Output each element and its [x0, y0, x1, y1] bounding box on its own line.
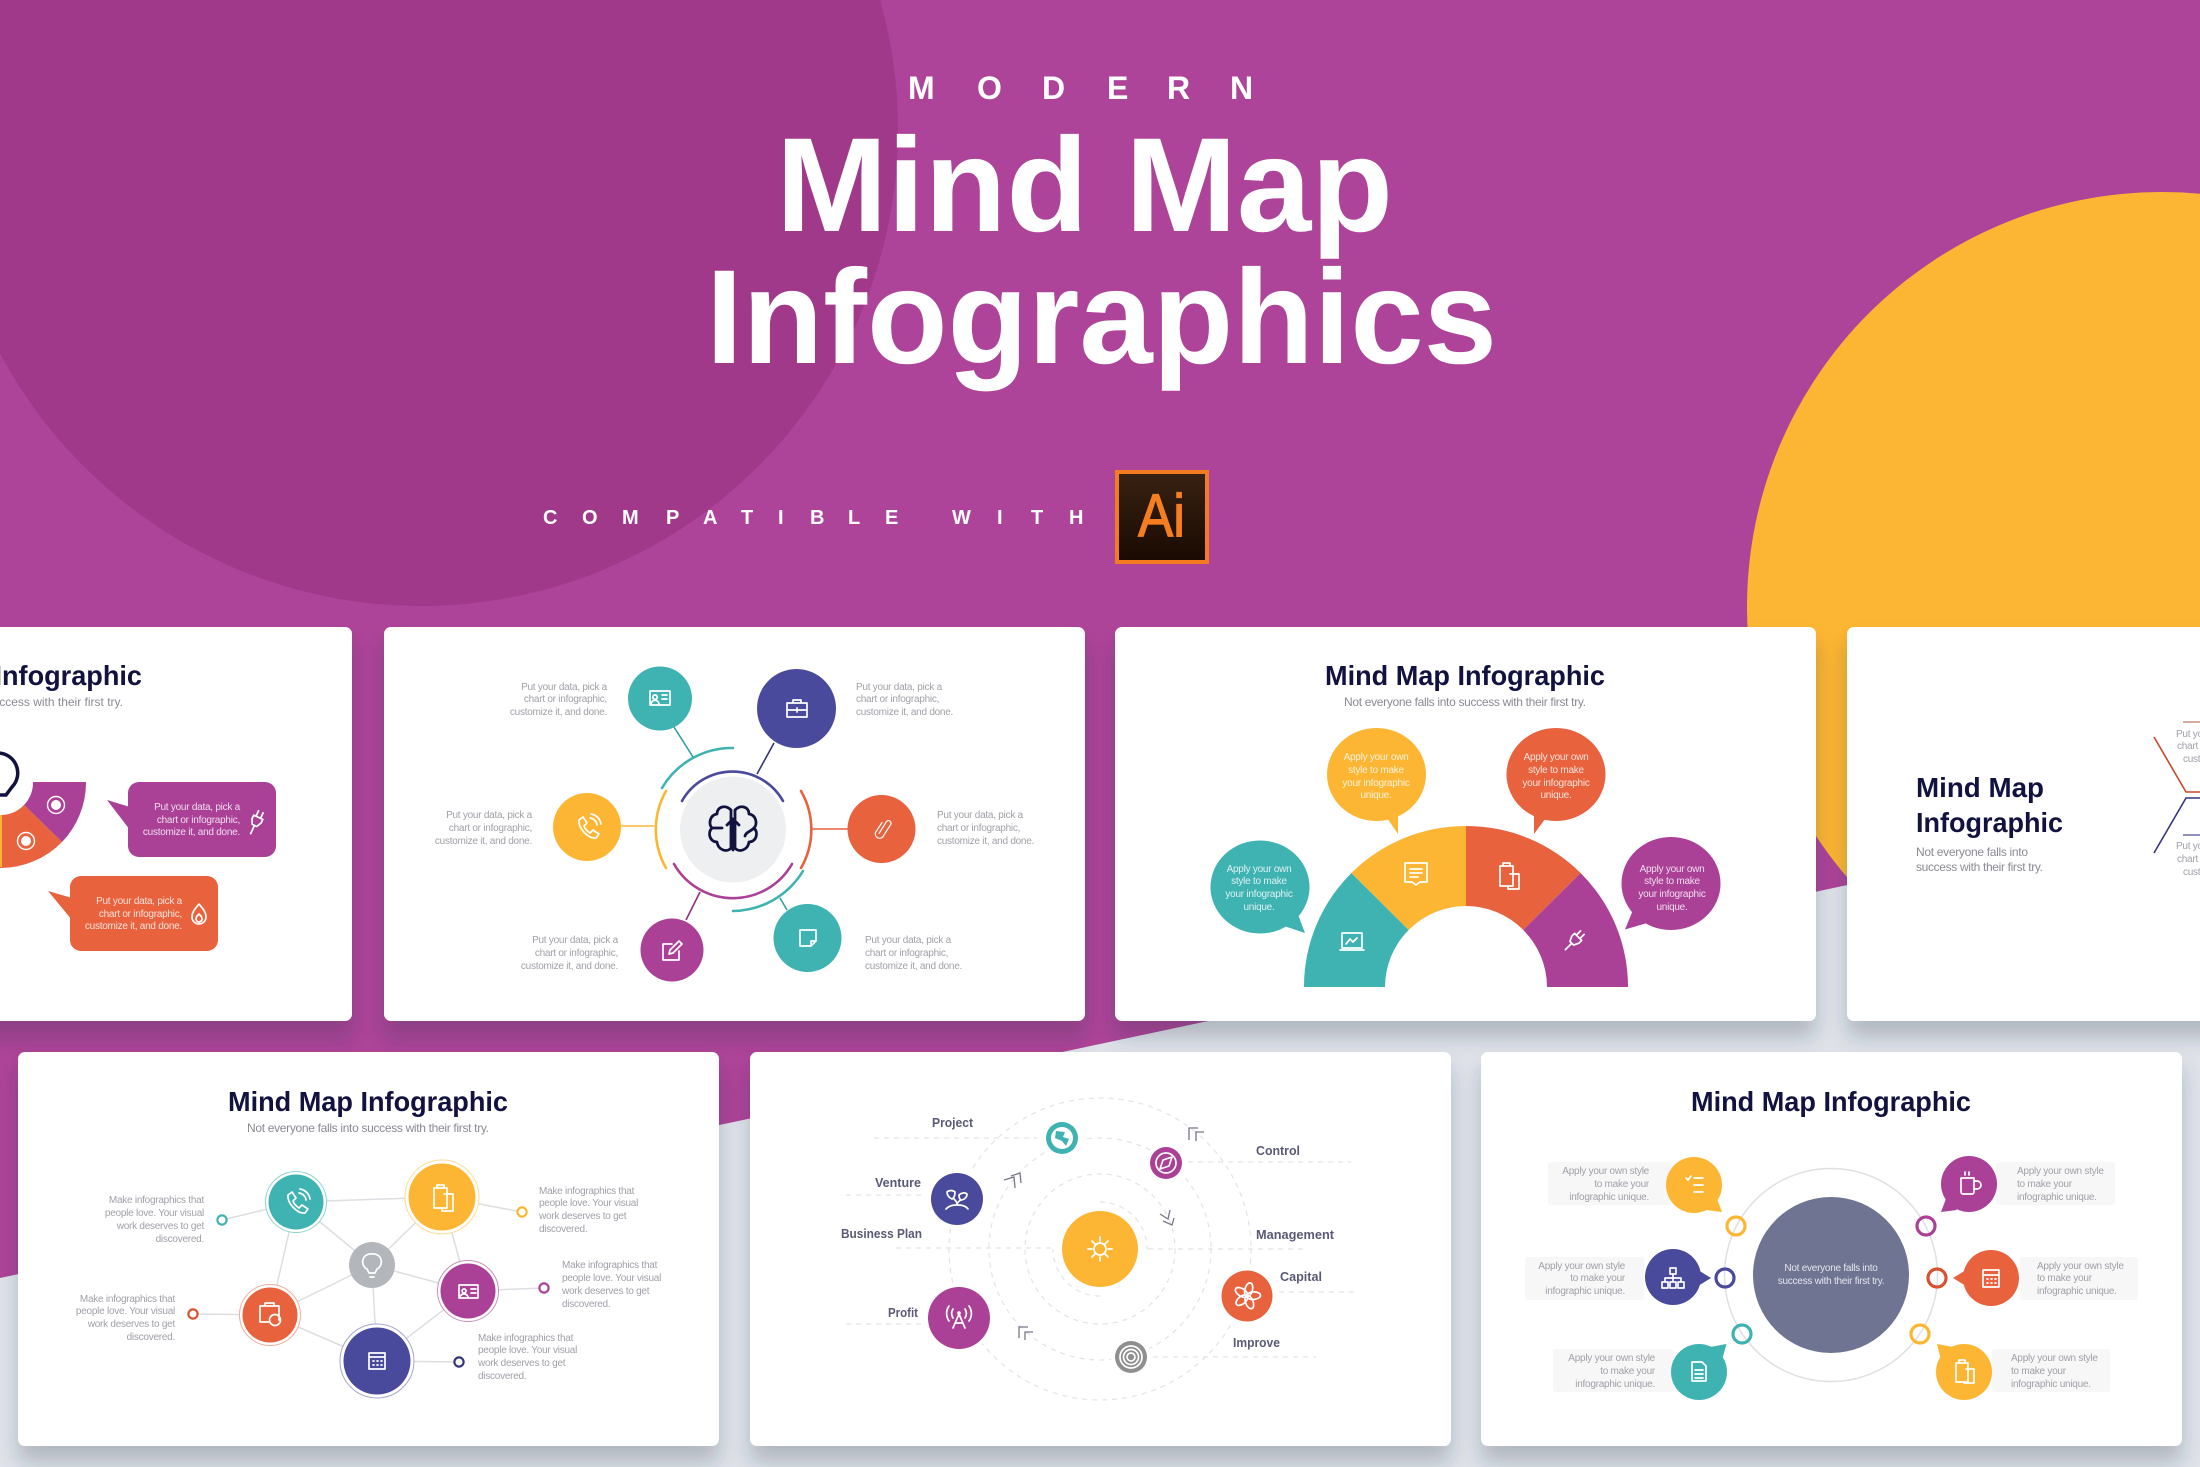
callout: orange [48, 876, 218, 951]
node: antenna [924, 1283, 994, 1353]
center sun [1062, 1211, 1138, 1287]
node: bulb [349, 1242, 395, 1288]
node: calendar clock [240, 1284, 300, 1346]
callout: orange: customize it, and done. [85, 921, 182, 932]
text labels: Make infographics that [562, 1260, 658, 1271]
callout: orange bubble: unique. [1540, 790, 1572, 801]
text labels: infographic unique. [1575, 1379, 1655, 1390]
orbit labels: Project [932, 1116, 974, 1130]
text labels: customize it, and done. [521, 961, 618, 972]
text labels: chart or infographic, [449, 823, 532, 834]
callout: purple [107, 782, 276, 857]
text labels: chart or infographic, [535, 948, 618, 959]
text labels: Put your data, pick a [865, 935, 952, 946]
callout: purple bubble [1622, 837, 1720, 930]
text labels: customize it, and done. [510, 707, 607, 718]
callout: yellow bubble: your infographic [1342, 778, 1410, 789]
panel: semicircle arch [1115, 627, 1816, 1021]
text labels: to make your [1600, 1366, 1656, 1377]
text labels: work deserves to get [477, 1358, 566, 1369]
cropped text labels [2176, 729, 2200, 878]
heading: Mind Map [1916, 772, 2044, 803]
compatible with label: COMPATIBLE [543, 507, 898, 529]
bubble: clipboard [1936, 1344, 1992, 1400]
text labels: Make infographics that [539, 1186, 635, 1197]
text labels: infographic unique. [1569, 1192, 1649, 1203]
orbit labels: Venture [875, 1176, 921, 1190]
icons on arch [1340, 863, 1586, 953]
node: pinwheel [1217, 1266, 1277, 1326]
subheading: success with their first try. [1916, 860, 2043, 874]
icon: Adobe Illustrator logo: Ai [1138, 482, 1185, 549]
eyebrow: MODERN: MODERN [908, 70, 1253, 106]
orbit labels: Capital [1280, 1270, 1322, 1284]
text labels: infographic unique. [2011, 1379, 2091, 1390]
text labels: customize it, and done. [435, 836, 532, 847]
node: orange paperclip [848, 795, 916, 863]
heading: Mind Map Infographic [1325, 660, 1605, 691]
text labels: work deserves to get [538, 1211, 627, 1222]
network lines [193, 1197, 544, 1362]
text labels: to make your [1594, 1179, 1650, 1190]
text labels [1538, 1166, 2124, 1390]
callout: purple bubble: Apply your own [1640, 864, 1704, 875]
title: Mind Map Infographics [706, 111, 1497, 392]
connectors [621, 727, 848, 920]
text labels: work deserves to get [561, 1286, 650, 1297]
orbit labels: Business Plan [841, 1227, 922, 1241]
text labels [435, 682, 1034, 972]
callout: teal bubble: unique. [1243, 902, 1275, 913]
panel: right cropped slide [1847, 627, 2200, 1021]
text labels: to make your [1570, 1273, 1626, 1284]
text labels: work deserves to get [116, 1221, 204, 1232]
node: indigo briefcase [757, 669, 836, 748]
text labels: Apply your own style [2011, 1353, 2098, 1364]
callout: orange bubble: style to make [1528, 765, 1585, 776]
text labels: infographic unique. [2017, 1192, 2097, 1203]
callout: purple: Put your data, pick a [154, 802, 241, 813]
connector lines [2154, 722, 2200, 853]
node: clipboard [405, 1160, 479, 1234]
text labels: Put your data, pick a [446, 810, 533, 821]
callout: purple bubble: unique. [1656, 902, 1688, 913]
text labels: Make infographics that [478, 1333, 574, 1344]
heading [1916, 772, 2063, 838]
text labels: discovered. [127, 1332, 175, 1343]
callout: purple bubble: your infographic [1638, 889, 1706, 900]
orbit labels: Improve [1233, 1336, 1280, 1350]
panel: hub with speech bubbles [1481, 1052, 2182, 1446]
callout: teal bubble [1210, 840, 1310, 934]
text labels [76, 1186, 661, 1382]
heading: Infographic [1916, 807, 2063, 838]
marker rings [188, 1207, 549, 1367]
text labels: people love. Your visual [105, 1208, 204, 1219]
callout: teal bubble: Apply your own [1227, 864, 1291, 875]
text labels: Apply your own style [1562, 1166, 1650, 1177]
node: purple edit [640, 918, 704, 982]
compatible with label: WITH [952, 507, 1083, 529]
callout: orange bubble: your infographic [1522, 778, 1590, 789]
center circle: success with their first try. [1778, 1276, 1884, 1287]
compatible with label [543, 507, 1083, 529]
orbit labels: Management [1256, 1228, 1335, 1242]
text labels: discovered. [562, 1299, 610, 1310]
callout: teal bubble: style to make [1231, 876, 1288, 887]
subheading [1916, 845, 2043, 874]
text labels: Apply your own style [2017, 1166, 2104, 1177]
text labels: customize it, and done. [856, 707, 953, 718]
text labels: work deserves to get [87, 1319, 175, 1330]
text labels: chart or infographic, [856, 694, 939, 705]
subheading: Not everyone falls into [1916, 845, 2028, 859]
text labels: to make your [2017, 1179, 2073, 1190]
node: phone [266, 1172, 326, 1232]
panel: network mind map [18, 1052, 719, 1446]
orbit labels: Profit [888, 1306, 919, 1320]
text labels: Put your data, pick a [532, 935, 619, 946]
text labels: infographic unique. [2037, 1286, 2117, 1297]
ring segments [0, 782, 86, 868]
callout: orange: chart or infographic, [99, 909, 182, 920]
panel: orbit mind map [750, 1052, 1451, 1446]
arch segments [1304, 826, 1628, 987]
heading: Mind Map Infographic [228, 1086, 508, 1117]
arcs around center [656, 748, 811, 911]
marker rings [1716, 1217, 1946, 1343]
node: yellow phone [553, 793, 621, 861]
center circle with brain icon [680, 776, 786, 882]
callout: yellow bubble [1327, 728, 1426, 834]
callout: purple: chart or infographic, [157, 815, 240, 826]
dashed orbits [949, 1098, 1251, 1400]
bubble: checklist [1666, 1157, 1722, 1213]
arrows [1004, 1128, 1204, 1340]
callout: purple: customize it, and done. [143, 827, 240, 838]
text labels: Put your data, pick a [521, 682, 608, 693]
text labels: chart or infographic, [524, 694, 607, 705]
callout: yellow bubble: style to make [1348, 765, 1405, 776]
heading: Mind Map Infographic [1691, 1086, 1971, 1117]
orbit labels [841, 1116, 1335, 1350]
node: calendar [340, 1324, 414, 1398]
node: teal note [774, 904, 842, 972]
icon: Adobe Illustrator logo [1117, 472, 1207, 562]
text labels: people love. Your visual [562, 1273, 661, 1284]
callout: orange bubble [1506, 728, 1606, 834]
text labels: chart or infographic, [937, 823, 1020, 834]
icon: light bulb [0, 753, 18, 795]
node: compass [1146, 1143, 1186, 1183]
text labels: discovered. [156, 1234, 204, 1245]
panel: brain mind map [384, 627, 1085, 1021]
node: teal id card [628, 666, 692, 730]
text labels: Make infographics that [109, 1195, 204, 1206]
text labels: to make your [2037, 1273, 2093, 1284]
node: globe [1042, 1118, 1082, 1158]
text labels: people love. Your visual [478, 1345, 577, 1356]
orbit labels: Control [1256, 1144, 1300, 1158]
center circle: Not everyone falls into [1784, 1263, 1878, 1274]
title: Mind Map Infographics: Mind Map [776, 111, 1393, 260]
text labels: Put your data, pick a [937, 810, 1024, 821]
bubble: document [1671, 1344, 1727, 1400]
node: id card [438, 1260, 498, 1322]
text labels: Put your data, pick a [856, 682, 943, 693]
bubble: hierarchy [1645, 1249, 1711, 1305]
text labels: people love. Your visual [76, 1306, 175, 1317]
callout: purple bubble: style to make [1644, 876, 1701, 887]
text labels: discovered. [539, 1224, 587, 1235]
dashed label lines [846, 1138, 1356, 1357]
text background boxes [1525, 1162, 2138, 1392]
text labels: Apply your own style [2037, 1261, 2124, 1272]
callout: teal bubble: your infographic [1225, 889, 1293, 900]
callout: orange bubble: Apply your own [1524, 752, 1588, 763]
bubble: calendar [1953, 1250, 2019, 1306]
text labels: Apply your own style [1568, 1353, 1656, 1364]
subheading: Not everyone falls into success with their first try. [247, 1121, 489, 1135]
outer ring [1724, 1168, 1938, 1382]
text labels: infographic unique. [1545, 1286, 1625, 1297]
node: target [1111, 1337, 1151, 1377]
text labels: chart or infographic, [865, 948, 948, 959]
bubble: cup [1941, 1156, 1997, 1212]
title: Mind Map Infographics: Infographics [706, 243, 1497, 392]
text labels: customize it, and done. [937, 836, 1034, 847]
subheading: Not everyone falls into success with their first try. [1344, 695, 1586, 709]
text labels: Apply your own style [1538, 1261, 1626, 1272]
center circle [1753, 1197, 1909, 1353]
text labels: Make infographics that [80, 1294, 175, 1305]
panel: left cropped slide [0, 627, 352, 1021]
node: sprout [927, 1169, 987, 1229]
text labels: people love. Your visual [539, 1198, 638, 1209]
text labels: to make your [2011, 1366, 2067, 1377]
callout: orange: Put your data, pick a [96, 896, 183, 907]
text labels: discovered. [478, 1371, 526, 1382]
callout: yellow bubble: unique. [1360, 790, 1392, 801]
callout: yellow bubble: Apply your own [1344, 752, 1408, 763]
text labels: customize it, and done. [865, 961, 962, 972]
